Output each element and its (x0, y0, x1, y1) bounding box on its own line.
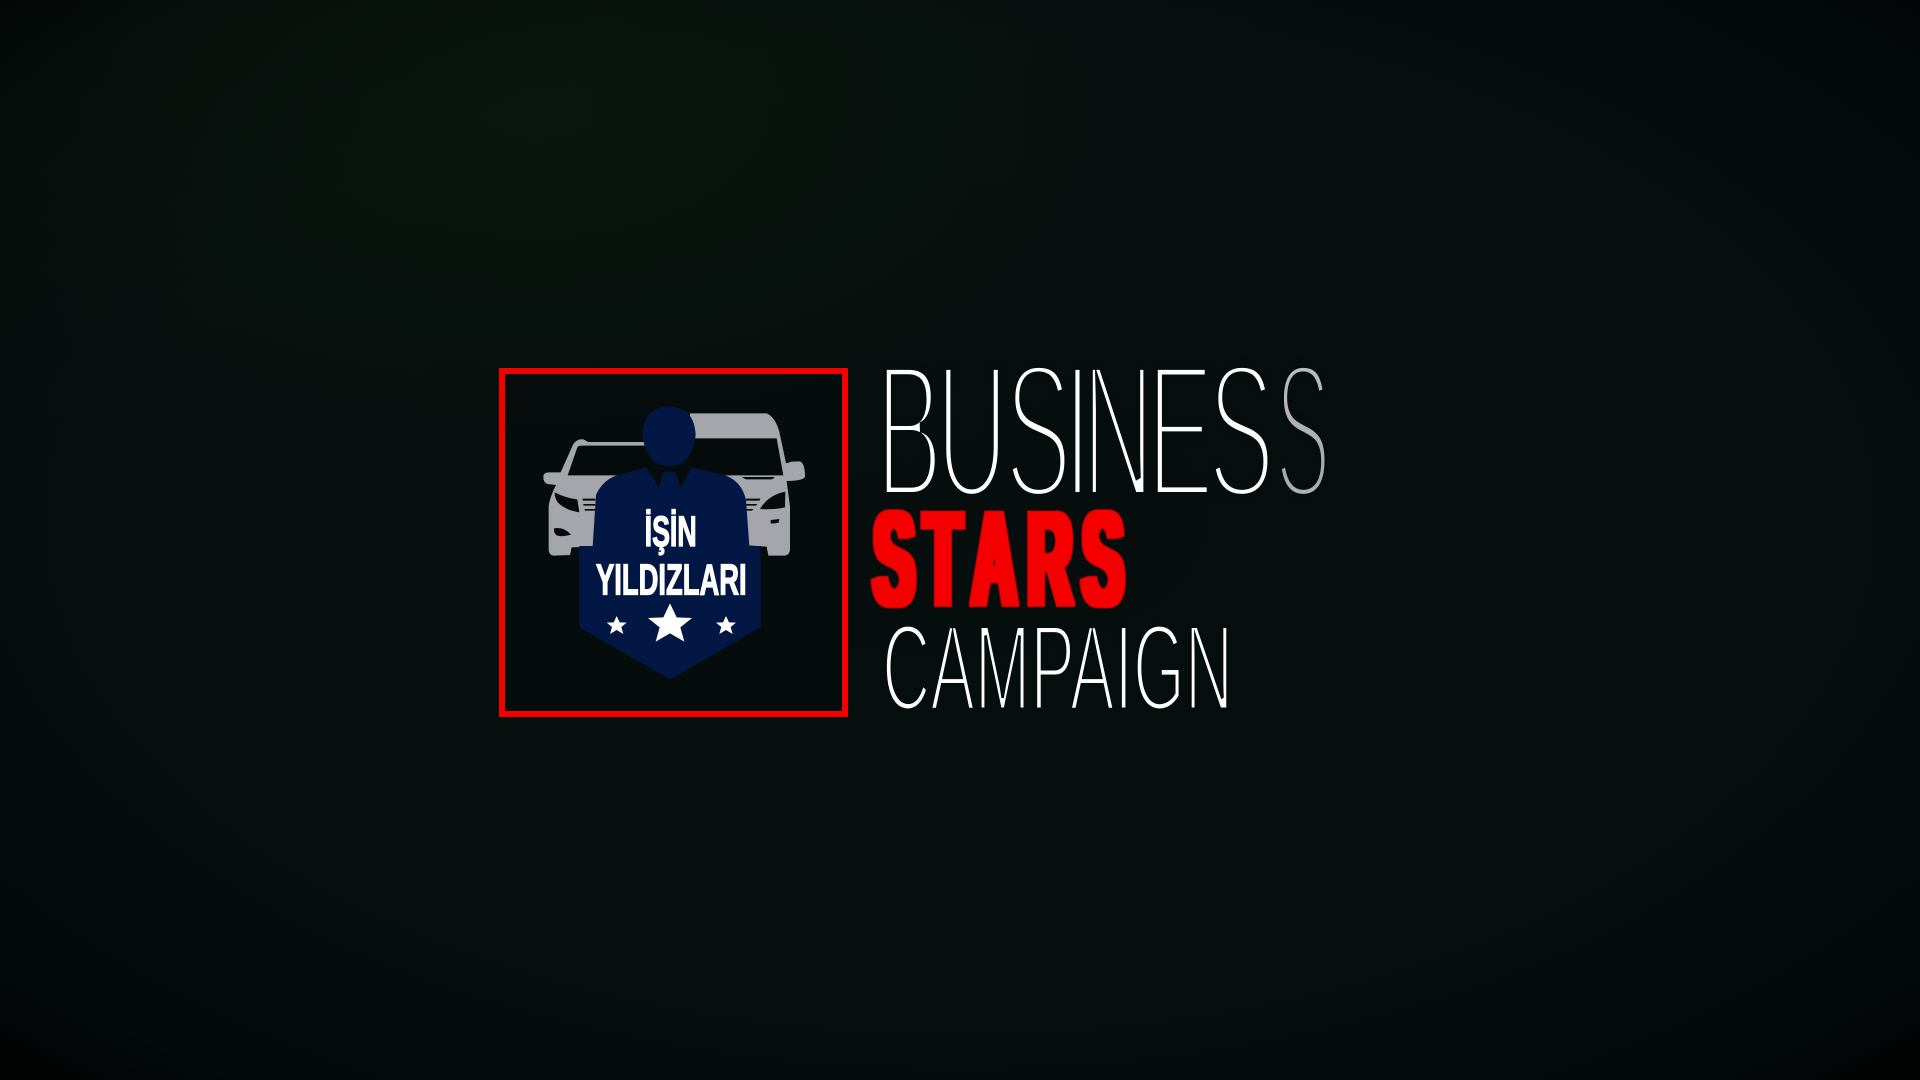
icon: businessman silhouette and shield (579, 407, 761, 679)
icon: three stars (607, 603, 736, 642)
title: BUSINESS: S (1275, 324, 1330, 539)
title: BUSINESS: BUSINES (876, 324, 1275, 538)
badge text: ISIN: İŞİN (645, 508, 697, 556)
title: STARS: STARS (874, 486, 1123, 635)
icon: right van (690, 413, 805, 556)
logo: Isin Yildizlari badge (543, 407, 805, 679)
icon: left car (543, 439, 650, 556)
title: CAMPAIGN: CAMPAIGN (882, 598, 1233, 736)
badge text: YILDIZLARI: YILDIZLARI (596, 556, 747, 604)
logo frame (502, 371, 845, 714)
